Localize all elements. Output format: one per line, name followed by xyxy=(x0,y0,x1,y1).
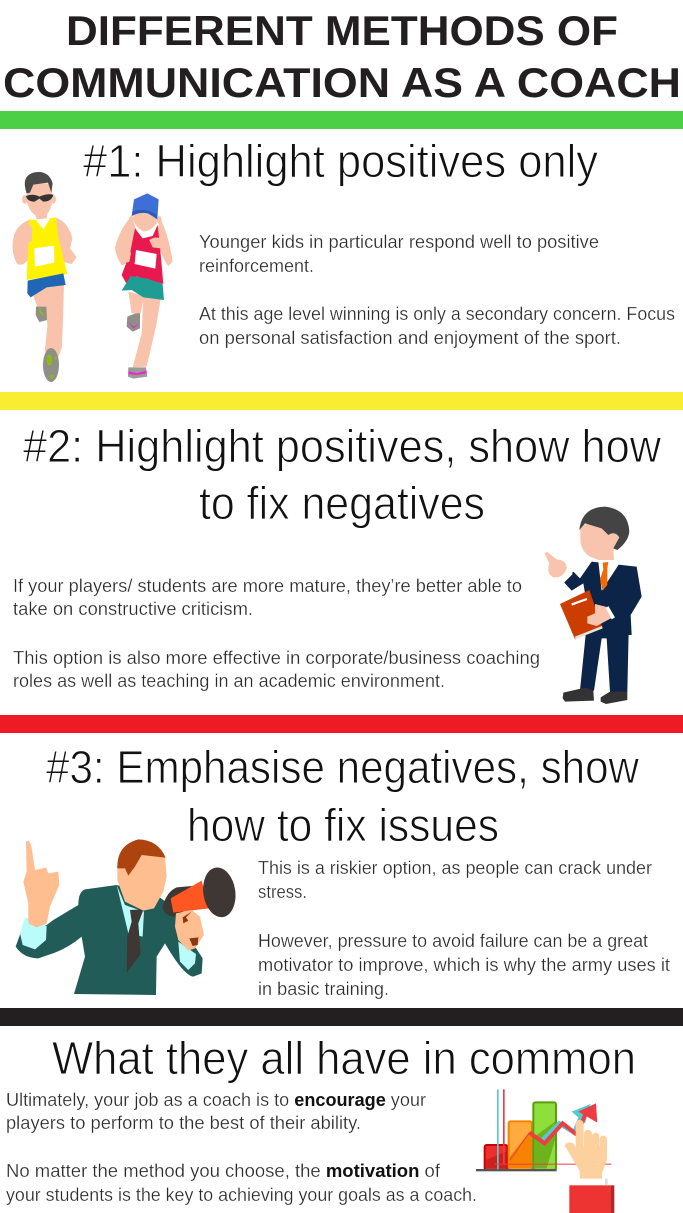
title: DIFFERENT METHODS OF xyxy=(66,7,618,54)
black section bar xyxy=(0,1008,683,1026)
text block: method 2: take on constructive criticism. xyxy=(13,598,253,619)
icon: man with megaphone xyxy=(16,839,239,995)
heading: method 3: #3: Emphasise negatives, show xyxy=(46,741,640,793)
panel: method 1 xyxy=(12,135,675,382)
heading: common: What they all have in common xyxy=(52,1032,636,1084)
text block: method 1: At this age level winning is only a secondary concern. Focus xyxy=(199,303,675,324)
text block: method 3: in basic training. xyxy=(258,978,389,999)
trend arrow xyxy=(510,1103,597,1160)
text block: method 2: roles as well as teaching in an academic environment. xyxy=(13,670,445,691)
red section bar xyxy=(0,715,683,733)
text block: method 2 xyxy=(13,575,540,691)
text block: method 3 xyxy=(258,857,670,999)
text block: method 1 xyxy=(199,231,675,348)
text block: common: your students is the key to achieving your goals as a coach. xyxy=(6,1184,477,1205)
text block: common: Ultimately, your job as a coach is to encourage your xyxy=(6,1089,426,1110)
yellow section bar xyxy=(0,392,683,410)
text block: method 2: This option is also more effective in corporate/business coaching xyxy=(13,647,540,668)
heading: method 2: #2: Highlight positives, show how xyxy=(23,420,662,472)
panel: what they all have in common xyxy=(6,1032,636,1213)
heading: method 3: how to fix issues xyxy=(187,799,499,851)
green section bar xyxy=(0,111,683,129)
hand xyxy=(565,1120,607,1179)
panel: method 2 xyxy=(13,420,662,704)
text block: method 1: on personal satisfaction and enjoyment of the sport. xyxy=(199,327,621,348)
text block: method 3: However, pressure to avoid failure can be a great xyxy=(258,930,648,951)
text block: method 2: If your players/ students are more mature, they’re better able to xyxy=(13,575,522,596)
text block: common: players to perform to the best of their ability. xyxy=(6,1112,361,1133)
text block: common xyxy=(6,1089,477,1205)
text block: method 1: reinforcement. xyxy=(199,255,314,276)
heading: method 1: #1: Highlight positives only xyxy=(83,135,598,187)
panel: method 3 xyxy=(16,741,670,999)
title: COMMUNICATION AS A COACH xyxy=(3,59,681,106)
text block: method 3: This is a riskier option, as people can crack under xyxy=(258,857,652,878)
heading: method 2 xyxy=(23,420,662,529)
heading: method 3 xyxy=(46,741,640,851)
text block: common: No matter the method you choose, the motivation of xyxy=(6,1160,441,1181)
male runner xyxy=(12,172,77,382)
icon: bar chart with hand xyxy=(476,1089,614,1213)
text block: method 1: Younger kids in particular respond well to positive xyxy=(199,231,599,252)
heading: method 2: to fix negatives xyxy=(199,477,485,529)
icon: businessman with book xyxy=(545,507,642,704)
title xyxy=(3,7,681,106)
sleeve xyxy=(569,1179,614,1213)
text block: method 3: stress. xyxy=(258,881,307,902)
chart bars xyxy=(476,1089,611,1171)
text block: method 3: motivator to improve, which is why the army uses it xyxy=(258,954,670,975)
icon: two runners xyxy=(12,172,173,382)
female runner xyxy=(115,193,173,379)
